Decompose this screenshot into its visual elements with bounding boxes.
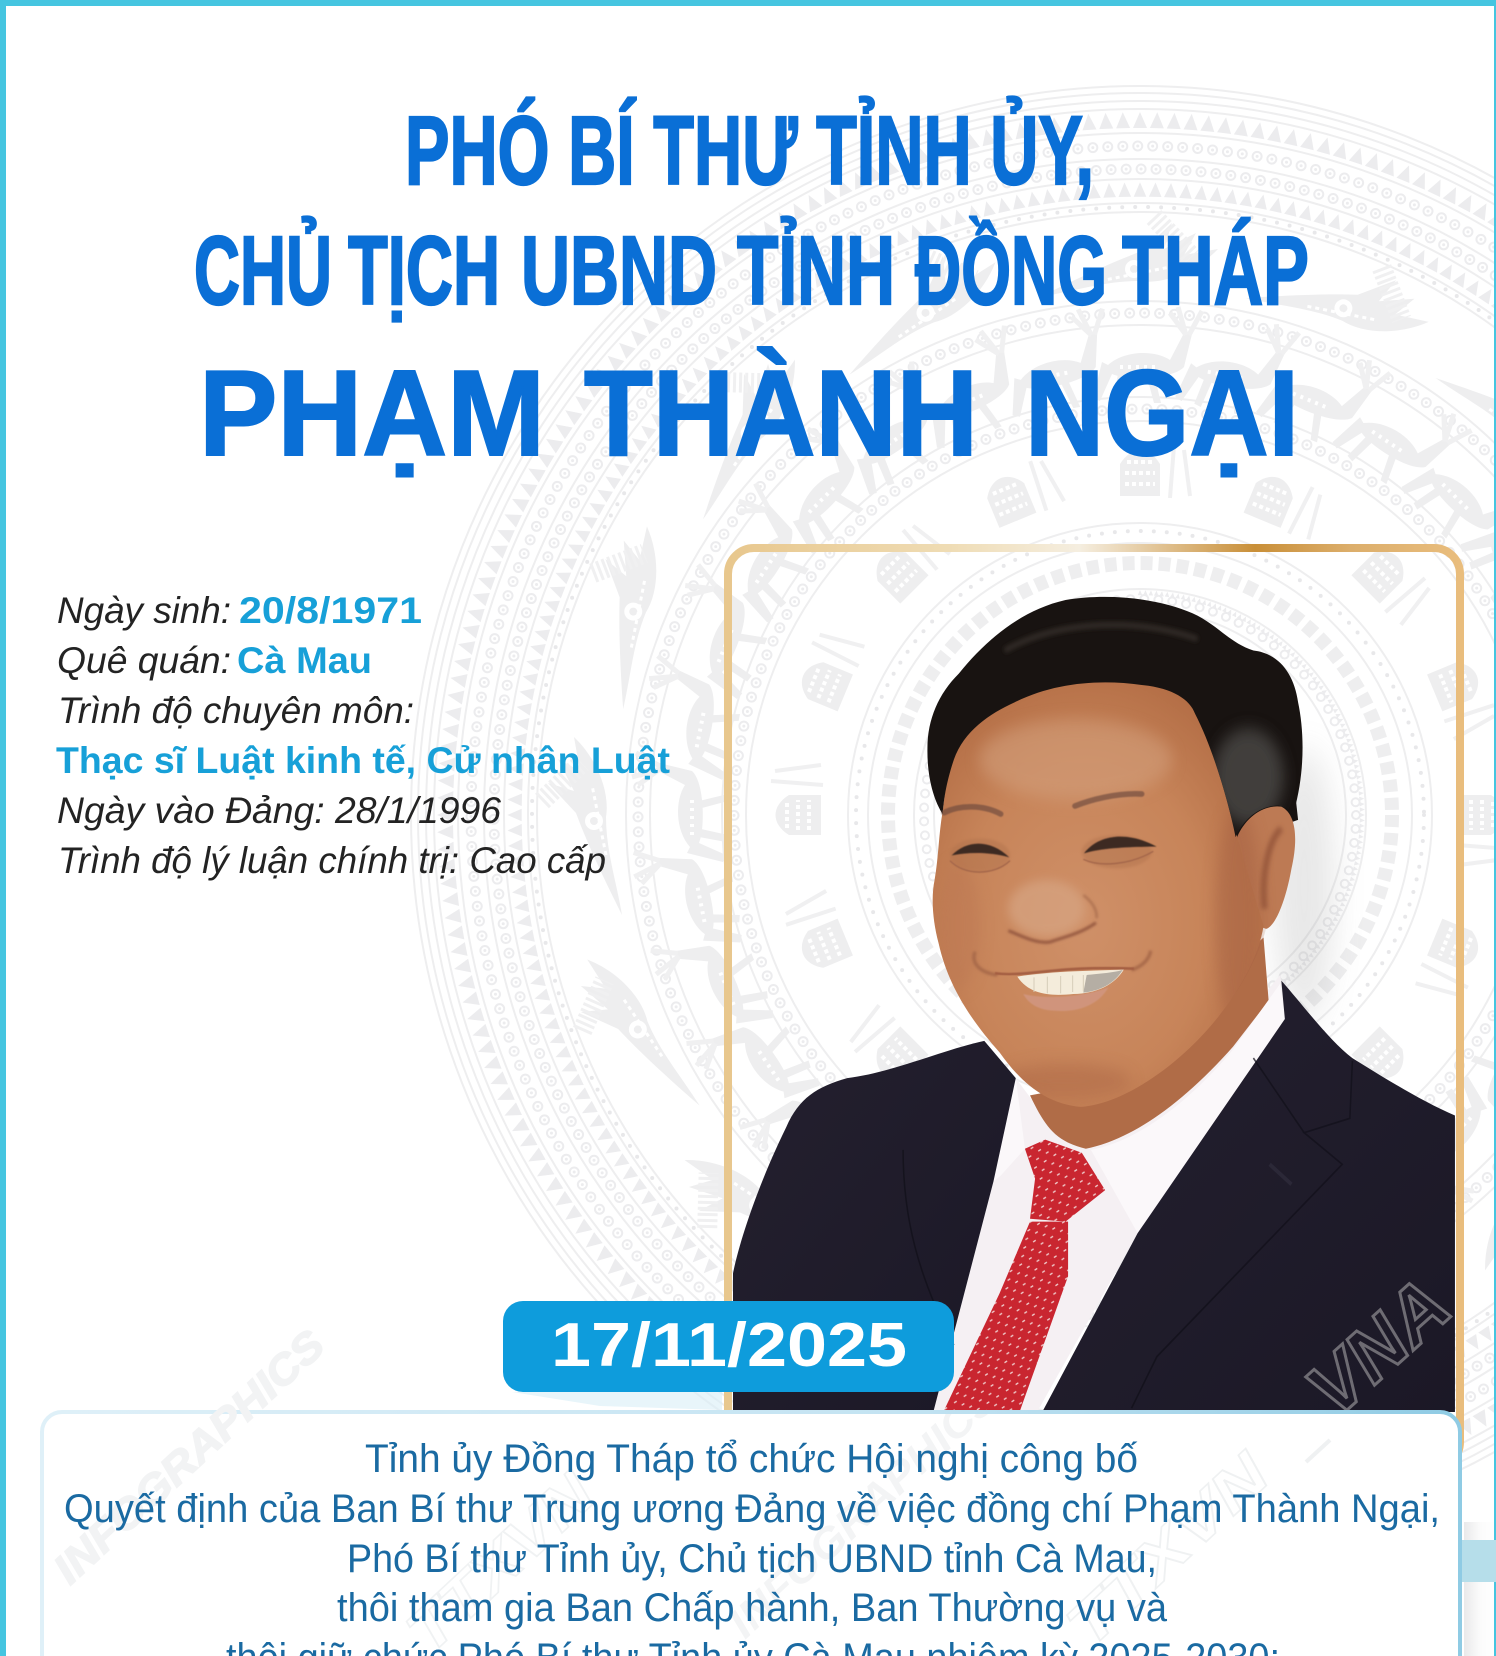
- title line 3: name: [199, 345, 1299, 481]
- portrait photo: [733, 597, 1455, 1414]
- facial features: [944, 794, 1157, 1011]
- face modelling: [939, 719, 1281, 1098]
- eyebrows: [944, 794, 1142, 814]
- watermark: ttxvn right: TTXVN: [1053, 1439, 1283, 1656]
- birth date: [57, 590, 422, 631]
- title line 1: PHÓ BÍ THƯ TỈNH ỦY,: [405, 96, 1094, 205]
- neck: [1030, 938, 1269, 1149]
- qualification label: Trình độ chuyên môn:: [58, 690, 414, 731]
- title line 3: name: PHẠM: [199, 345, 545, 481]
- home town: Quê quán:: [57, 640, 231, 681]
- title line 3: name: THÀNH: [584, 345, 978, 481]
- party admission date: Ngày vào Đảng: 28/1/1996: [57, 790, 501, 831]
- announcement line 4: thôi tham gia Ban Chấp hành, Ban Thường vụ và: [337, 1586, 1168, 1630]
- watermark: infographics centre: INFOGRAPHICS: [719, 1374, 1007, 1647]
- hair: [927, 597, 1303, 837]
- announcement line 1: Tỉnh ủy Đồng Tháp tổ chức Hội nghị công bố: [365, 1437, 1138, 1481]
- nose: [1008, 880, 1097, 942]
- head shadow: [1274, 748, 1335, 1024]
- announcement line 2: Quyết định của Ban Bí thư Trung ương Đảng về việc đồng chí Phạm Thành Ngại,: [64, 1487, 1440, 1531]
- watermark: dash: [1306, 1440, 1330, 1462]
- left cyan frame bar: [0, 0, 6, 1656]
- shirt: [934, 975, 1285, 1411]
- face: [933, 671, 1264, 1107]
- announcement panel: [42, 1412, 1460, 1656]
- date badge: [503, 1301, 954, 1392]
- title line 2: TỊCH: [348, 216, 500, 325]
- hair behind ear: [1236, 802, 1298, 838]
- qualification value: Thạc sĩ Luật kinh tế, Cử nhân Luật: [56, 740, 670, 781]
- announcement text: [64, 1437, 1440, 1656]
- portrait gold frame: [728, 548, 1460, 1468]
- suit jacket: [733, 981, 1455, 1414]
- biography facts: [56, 590, 670, 881]
- right edge panel fade: [1464, 1522, 1496, 1656]
- announcement line 3: Phó Bí thư Tỉnh ủy, Chủ tịch UBND tỉnh Cà Mau,: [347, 1537, 1157, 1581]
- watermark: vna: VNA: [1290, 1262, 1466, 1433]
- title line 2: THÁP: [1122, 216, 1309, 325]
- watermark: infographics left: INFOGRAPHICS: [44, 1321, 333, 1593]
- right cyan frame bar: [1494, 0, 1496, 1656]
- birth date: Ngày sinh:: [57, 590, 231, 631]
- right light blue band: [1460, 1540, 1496, 1582]
- greying side hair: [1005, 625, 1284, 826]
- home town: Cà Mau: [237, 640, 372, 681]
- date badge shadow: [512, 1392, 722, 1410]
- title line 2: [194, 216, 1309, 325]
- title line 2: UBND: [521, 216, 717, 325]
- eyes: [950, 835, 1157, 872]
- title line 3: name: NGẠI: [1025, 345, 1299, 481]
- watermarks: [44, 1262, 1466, 1656]
- shirt collar: [1000, 1000, 1269, 1149]
- tie: [944, 1140, 1105, 1411]
- title: [194, 96, 1309, 481]
- title line 2: TỈNH: [737, 216, 895, 325]
- lapels: [903, 1058, 1352, 1408]
- title line 2: CHỦ: [194, 216, 332, 325]
- date text: 17/11/2025: [551, 1311, 907, 1380]
- mouth and smile: [974, 951, 1151, 1011]
- title line 2: ĐỒNG: [915, 216, 1107, 325]
- birth date: 20/8/1971: [239, 590, 422, 631]
- ear: [1237, 806, 1295, 929]
- home town: [57, 640, 372, 681]
- watermark: vna: [1304, 1282, 1453, 1410]
- watermark: vna: VNA: [1290, 1262, 1466, 1433]
- political theory level: Trình độ lý luận chính trị: Cao cấp: [58, 840, 606, 881]
- top cyan frame bar: [0, 0, 1496, 6]
